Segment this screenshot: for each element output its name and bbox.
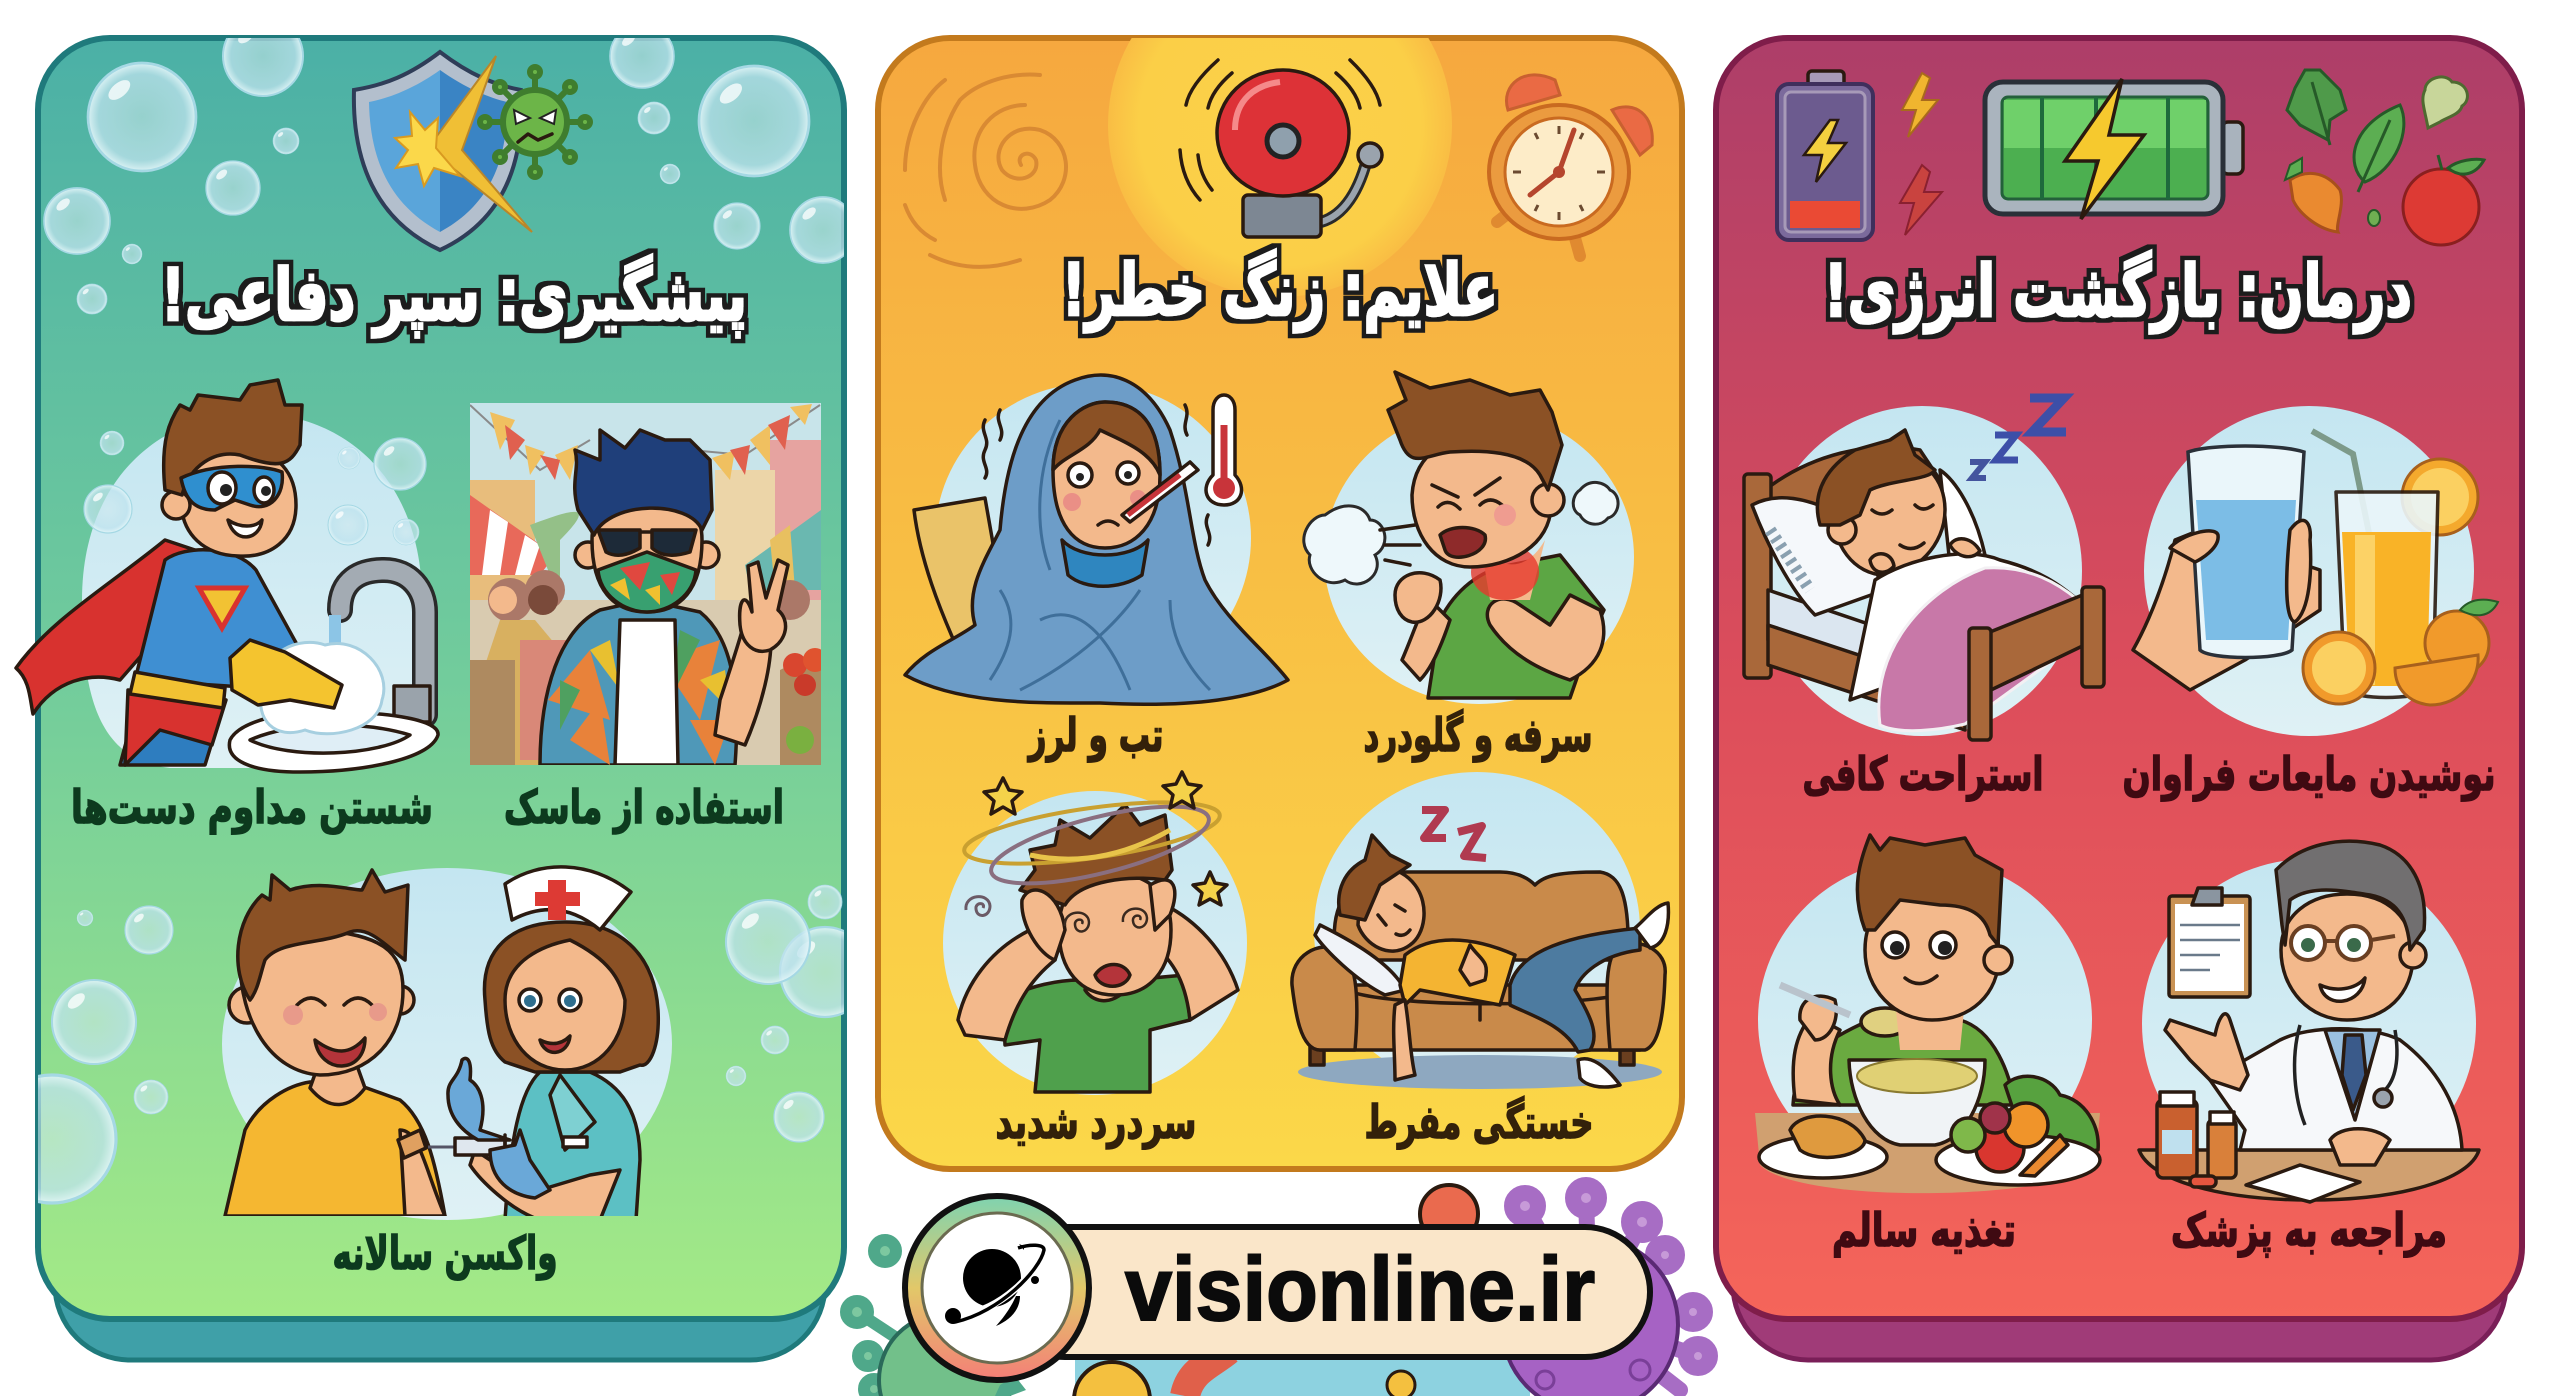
illustration: extreme fatigue on sofa xyxy=(1292,772,1668,1089)
icon: alarm bell with glow xyxy=(1108,38,1452,296)
label: annual vaccine: واکسن سالانه xyxy=(332,1226,558,1280)
icon: red worm xyxy=(1185,1350,1228,1396)
label: cough and sore throat: سرفه و گلودرد xyxy=(1364,708,1592,762)
icon: purple virus xyxy=(1502,1185,1710,1396)
label: fever and chills: تب و لرز xyxy=(1027,708,1164,762)
card face xyxy=(878,38,1682,1169)
illustration: severe headache xyxy=(943,772,1247,1095)
heading: symptoms: علایم: زنگ خطر! xyxy=(1062,248,1498,333)
decoration: bottom strip xyxy=(1075,1358,1530,1396)
illustration: superhero washing hands xyxy=(16,380,438,772)
label: use of mask: استفاده از ماسک xyxy=(504,780,784,834)
decoration: dizzy spiral xyxy=(905,75,1066,267)
icon: small lightning bolts xyxy=(1900,73,1942,235)
illustration: fever and chills xyxy=(905,375,1288,704)
icon: vegetables and fruits xyxy=(2285,70,2484,245)
footer: viruses and brand badge xyxy=(846,1185,1710,1396)
illustration: visiting a doctor xyxy=(2139,841,2479,1202)
illustration: annual vaccination xyxy=(222,867,672,1220)
illustration: resting in bed xyxy=(1744,398,2104,740)
icon: yellow ball xyxy=(1074,1362,1150,1396)
illustration: healthy food xyxy=(1755,835,2100,1193)
brand pill xyxy=(1000,1227,1650,1357)
label: frequent hand washing: شستن مداوم دست‌ها xyxy=(71,780,433,834)
illustration: man wearing a mask at market xyxy=(470,403,827,765)
icon: full battery xyxy=(1985,79,2243,219)
icon: low battery xyxy=(1777,71,1873,240)
heading: prevention: پیشگیری: سپر دفاعی! xyxy=(161,253,747,338)
label: adequate rest: استراحت کافی xyxy=(1802,747,2044,801)
icon: shield blocking virus xyxy=(354,52,590,250)
icon: small yellow ball xyxy=(1387,1371,1415,1396)
label: extreme fatigue: خستگی مفرط xyxy=(1364,1095,1594,1149)
card face xyxy=(38,38,844,1319)
icon: orange ball xyxy=(1420,1185,1478,1243)
card back plate xyxy=(1733,1100,2506,1360)
illustration: drinking plenty of fluids xyxy=(2133,406,2498,736)
brand text: visionline.ir xyxy=(1125,1240,1595,1340)
icon: alarm clock xyxy=(1489,75,1652,256)
icon: green virus xyxy=(846,1240,1026,1396)
soap bubbles xyxy=(0,16,870,1203)
label: see a doctor: مراجعه به پزشک xyxy=(2171,1203,2447,1258)
panel: symptoms xyxy=(878,0,1682,1169)
panel: prevention xyxy=(0,16,870,1360)
illustration: cough and sore throat xyxy=(1304,372,1634,704)
card back plate xyxy=(55,1100,825,1360)
brand logo xyxy=(905,1196,1089,1380)
label: healthy nutrition: تغذیه سالم xyxy=(1832,1203,2016,1257)
panel: treatment xyxy=(1716,38,2522,1360)
card face xyxy=(1716,38,2522,1319)
label: severe headache: سردرد شدید xyxy=(996,1095,1196,1149)
